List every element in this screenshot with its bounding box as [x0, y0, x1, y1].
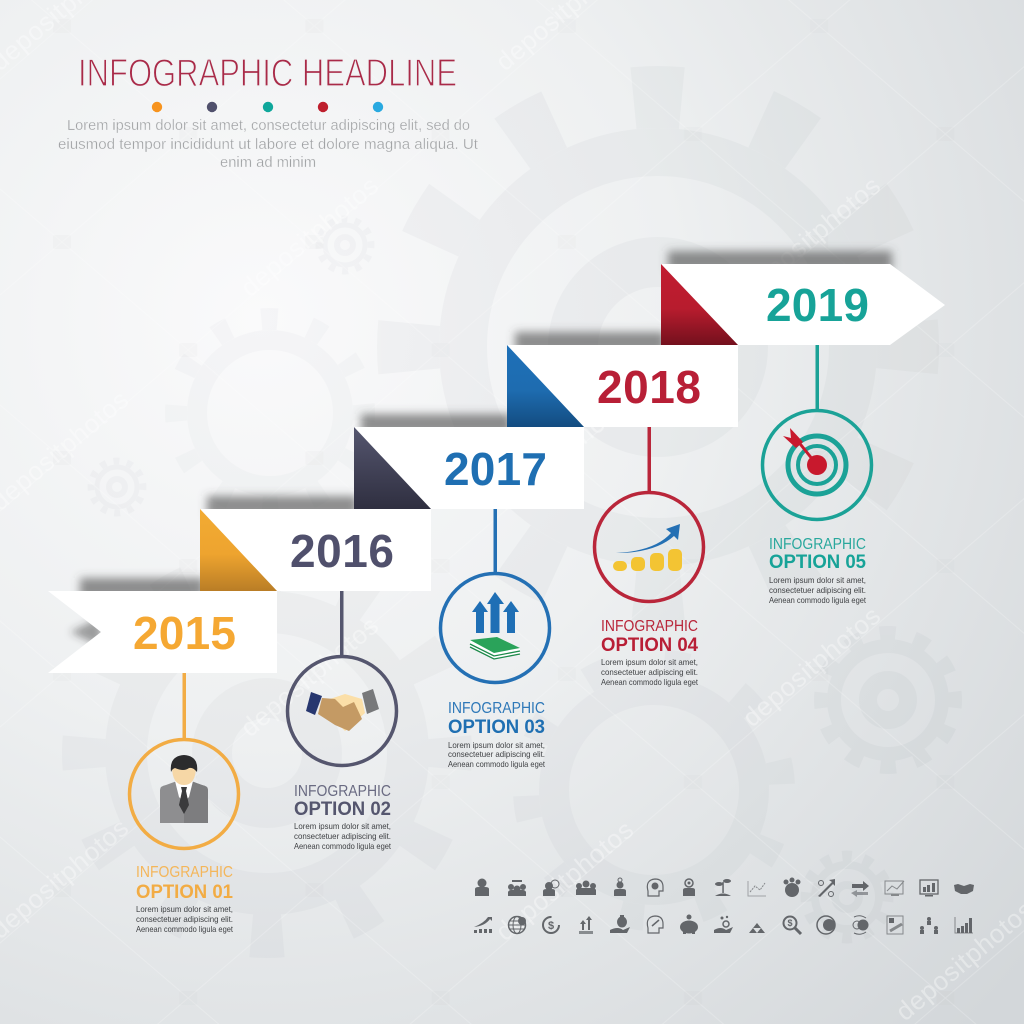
- ring 2017: [440, 574, 550, 682]
- icon row 2: [474, 914, 973, 934]
- icon: money arrows: [470, 592, 520, 659]
- connector 2017: [494, 509, 497, 574]
- caption: option 05: INFOGRAPHIC: [769, 536, 866, 553]
- caption: option 02: [294, 783, 392, 851]
- ribbon 2015: [48, 591, 277, 673]
- year 2015: 2015: [133, 607, 236, 659]
- caption: option 03: Aenean commodo ligula eget: [448, 760, 546, 769]
- gear: large upper right: [408, 97, 908, 597]
- caption: option 03: INFOGRAPHIC: [448, 700, 545, 717]
- background gears: [84, 97, 955, 938]
- connector 2016: [340, 591, 344, 657]
- fold 2016: [200, 509, 277, 591]
- fold 2018: [507, 345, 584, 427]
- gear: middle left: [176, 319, 364, 507]
- caption: option 04: Lorem ipsum dolor sit amet,: [601, 658, 698, 667]
- caption: option 02: Aenean commodo ligula eget: [294, 842, 392, 851]
- fold 2017: [354, 427, 431, 509]
- icon row 2: $: [787, 918, 793, 928]
- ribbon 2018: [507, 345, 738, 427]
- caption: option 03: [448, 700, 546, 769]
- year 2016: 2016: [290, 525, 394, 577]
- icon: target: [783, 428, 846, 494]
- year 2019: 2019: [766, 279, 869, 331]
- step 2015: [48, 591, 277, 848]
- gear: lower left: [84, 570, 450, 936]
- icon: coins and arrow: [613, 524, 682, 571]
- ribbon 2017: [354, 427, 584, 509]
- caption: option 04: Aenean commodo ligula eget: [601, 678, 699, 687]
- shadows behind banners: [80, 251, 892, 598]
- intro text: enim ad minim: [220, 154, 316, 171]
- caption: option 04: OPTION 04: [601, 634, 698, 656]
- gear: bottom small: [806, 856, 888, 938]
- year 2017: 2017: [444, 443, 547, 495]
- caption: option 01: INFOGRAPHIC: [136, 864, 233, 881]
- step 2017: [354, 427, 584, 682]
- caption: option 02: consectetuer adipiscing elit.: [294, 832, 391, 841]
- caption: option 01: Aenean commodo ligula eget: [136, 925, 234, 934]
- gear: lower centre: [509, 645, 799, 935]
- caption: option 01: [136, 864, 234, 934]
- caption: option 05: [769, 536, 867, 605]
- ring 2019: [762, 410, 872, 520]
- watermark text: depositphotos: [490, 384, 639, 517]
- caption: option 02: Lorem ipsum dolor sit amet,: [294, 822, 391, 831]
- caption: option 04: INFOGRAPHIC: [601, 618, 698, 635]
- caption: option 05: Lorem ipsum dolor sit amet,: [769, 576, 866, 585]
- watermark text: depositphotos: [235, 170, 384, 303]
- year 2018: 2018: [597, 361, 701, 413]
- ring 2016: [288, 656, 396, 766]
- icon: handshake: [306, 689, 379, 731]
- fold 2019: [661, 264, 738, 345]
- intro text: eiusmod tempor incididunt ut labore et dolore magna aliqua. Ut: [58, 136, 479, 153]
- intro text: Lorem ipsum dolor sit amet, consectetur adipiscing elit, sed do: [67, 117, 470, 134]
- ring 2015: [130, 740, 238, 848]
- caption: option 02: OPTION 02: [294, 798, 391, 820]
- icon row 2: $: [548, 920, 554, 932]
- caption: option 03: OPTION 03: [448, 716, 545, 738]
- caption: option 02: INFOGRAPHIC: [294, 783, 391, 800]
- watermark text: depositphotos: [737, 600, 886, 733]
- step 2019: [661, 264, 945, 520]
- caption: option 04: consectetuer adipiscing elit.: [601, 668, 698, 677]
- icon row 1: [475, 878, 974, 897]
- colour dots: [152, 102, 383, 112]
- caption: option 03: consectetuer adipiscing elit.: [448, 750, 545, 759]
- ribbon 2019: [661, 264, 945, 345]
- caption: option 01: OPTION 01: [136, 881, 233, 903]
- caption: option 05: Aenean commodo ligula eget: [769, 596, 867, 605]
- gear: small top: [319, 219, 371, 271]
- caption: option 01: Lorem ipsum dolor sit amet,: [136, 905, 233, 914]
- gear: small left: [91, 461, 143, 513]
- gear: right small: [821, 633, 955, 767]
- icon: businessman: [160, 755, 208, 823]
- intro text: [58, 117, 479, 171]
- connector 2019: [816, 345, 819, 411]
- caption: option 05: OPTION 05: [769, 551, 866, 573]
- watermark text: depositphotos: [490, 814, 639, 947]
- title: INFOGRAPHIC HEADLINE: [78, 52, 457, 95]
- caption: option 01: consectetuer adipiscing elit.: [136, 915, 233, 924]
- caption: option 05: consectetuer adipiscing elit.: [769, 586, 866, 595]
- step 2018: [507, 345, 738, 602]
- connector 2018: [648, 427, 651, 493]
- notch shadow: [70, 617, 101, 647]
- step 2016: [200, 509, 431, 766]
- connector 2015: [182, 673, 186, 739]
- caption: option 03: Lorem ipsum dolor sit amet,: [448, 741, 545, 750]
- watermark text: depositphotos: [737, 170, 886, 303]
- ribbon 2016: [200, 509, 431, 591]
- ring 2018: [594, 492, 704, 602]
- watermark text: depositphotos: [235, 610, 384, 743]
- caption: option 04: [601, 618, 699, 687]
